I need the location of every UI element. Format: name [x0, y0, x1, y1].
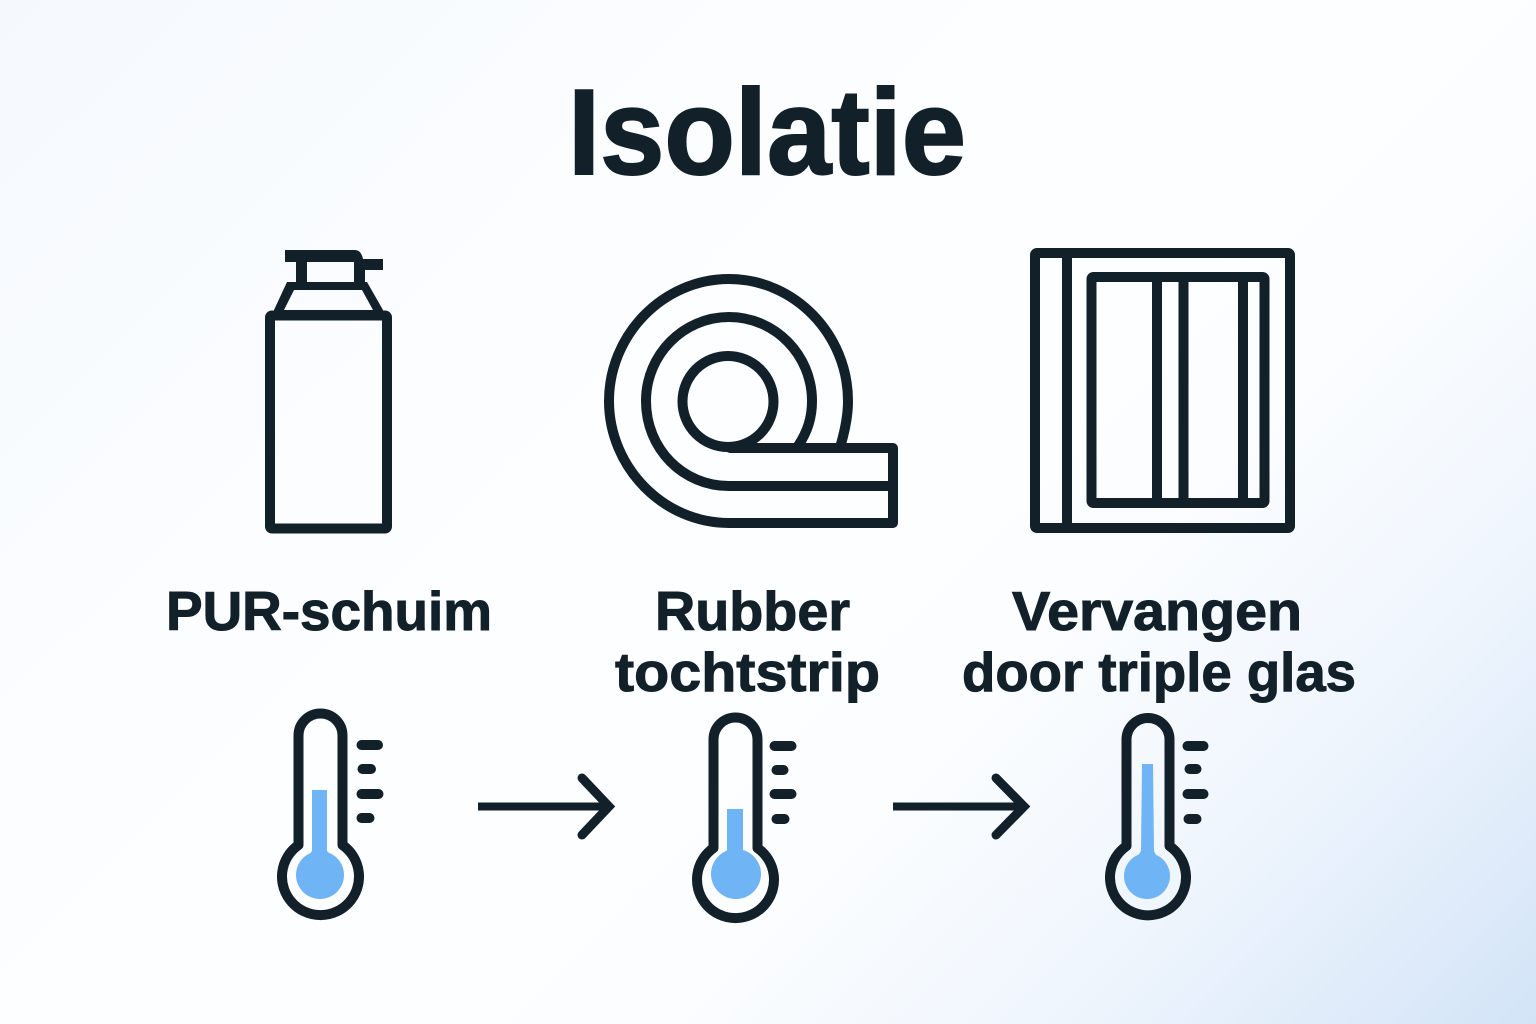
label: Vervangen door triple glas: door triple glas: [962, 641, 1356, 703]
title: Isolatie: [568, 64, 966, 200]
thermometer: low level: [282, 714, 378, 915]
thermometer: medium level: [697, 718, 792, 918]
label: Vervangen door triple glas: [962, 580, 1356, 703]
label: PUR-schuim: PUR-schuim: [166, 580, 492, 642]
icon: triple glass window: [1035, 253, 1290, 528]
label: Rubber tochtstrip: tochtstrip: [615, 641, 880, 703]
label: Vervangen door triple glas: Vervangen: [1012, 580, 1302, 642]
arrow: first to second: [478, 778, 609, 835]
label: Rubber tochtstrip: Rubber: [655, 580, 850, 642]
icon: rubber draught strip roll: [609, 279, 893, 523]
label: Rubber tochtstrip: [615, 580, 880, 703]
icon: PUR foam spray can: [270, 250, 387, 528]
thermometer: high level: [1110, 718, 1204, 915]
arrow: second to third: [893, 778, 1024, 835]
